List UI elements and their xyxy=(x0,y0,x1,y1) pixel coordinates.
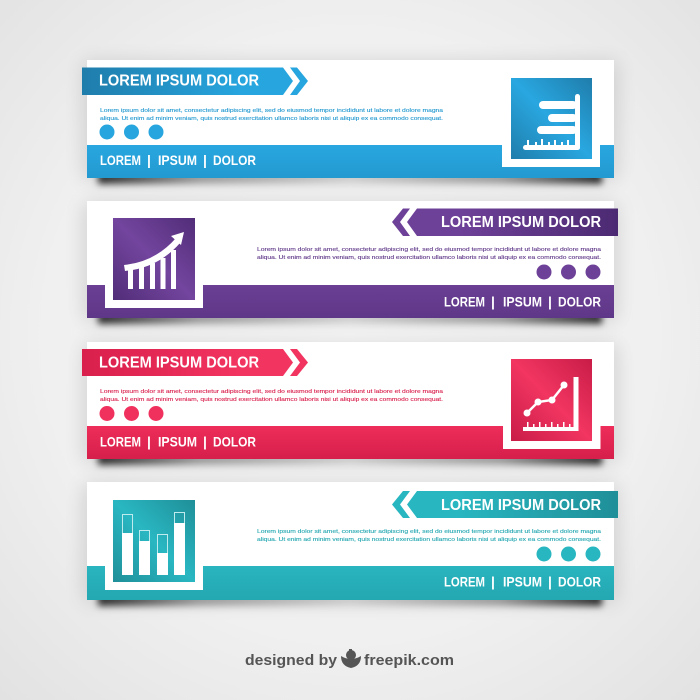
banner 2 card xyxy=(87,201,614,318)
banner 3: red xyxy=(82,342,617,465)
banner 3 ribbon xyxy=(82,349,308,376)
banner 4 band label: | xyxy=(548,574,552,590)
banner 1 card xyxy=(87,60,614,178)
icon: rising bars with arrow xyxy=(113,218,195,300)
banner 3 heading: LOREM IPSUM DOLOR xyxy=(99,354,259,372)
icon: line chart xyxy=(511,359,592,441)
banner 4 band xyxy=(87,566,614,600)
banner 4 band label: LOREM xyxy=(444,574,485,590)
banner 4 band label: IPSUM xyxy=(503,574,542,590)
banner 1 paragraph: Lorem ipsum dolor sit amet, consectetur adipiscing elit, sed do eiusmod tempor incididunt ut labore et dolore magna xyxy=(100,108,444,114)
banner 2 band label: LOREM xyxy=(444,294,485,310)
banner 2 dots xyxy=(536,264,600,280)
banner 1 ribbon xyxy=(82,68,308,95)
banner 1 band label: IPSUM xyxy=(158,152,197,168)
banner 3 band label: | xyxy=(203,434,207,450)
banner 2 heading: LOREM IPSUM DOLOR xyxy=(441,214,601,231)
banner 3 band label: LOREM xyxy=(100,434,141,450)
banner 1: blue xyxy=(82,60,617,184)
banner 2 band label: | xyxy=(548,294,552,310)
banner 2 paragraph: Lorem ipsum dolor sit amet, consectetur adipiscing elit, sed do eiusmod tempor incididunt ut labore et dolore magna xyxy=(257,247,602,253)
credit text left: designed by xyxy=(245,652,338,669)
banner 1 band label: LOREM xyxy=(100,152,141,168)
banner 3 paragraph: Lorem ipsum dolor sit amet, consectetur adipiscing elit, sed do eiusmod tempor incididunt ut labore et dolore magna xyxy=(100,389,444,395)
footer credit xyxy=(245,649,454,669)
banner 2 band xyxy=(87,285,614,318)
banner 1 shadow xyxy=(84,62,617,184)
banner 3 band label: IPSUM xyxy=(158,434,197,450)
banner 1 band label: | xyxy=(203,152,207,168)
banner 4 shadow xyxy=(84,484,617,606)
banner 4 card xyxy=(87,482,614,600)
banner 2 band label: DOLOR xyxy=(558,294,601,310)
banner 1 band label: | xyxy=(147,152,151,168)
banner 3 band label: DOLOR xyxy=(213,434,256,450)
banner 4 ribbon xyxy=(392,491,618,518)
banner 1 band label: DOLOR xyxy=(213,152,256,168)
banner 4 band label: | xyxy=(491,574,495,590)
banner 3 card xyxy=(87,342,614,459)
banner 4: teal xyxy=(84,482,618,606)
banner 2 band label: IPSUM xyxy=(503,294,542,310)
credit text right: freepik.com xyxy=(364,652,454,669)
banner 1 band xyxy=(87,145,614,178)
banner 2: purple xyxy=(84,201,618,324)
banner 1 paragraph: aliqua. Ut enim ad minim veniam, quis nostrud exercitation ullamco laboris nisi ut aliquip ex ea commodo consequat. xyxy=(100,116,444,122)
banner 3 band label: | xyxy=(147,434,151,450)
icon: horizontal bar chart xyxy=(511,78,592,159)
banner 4 paragraph: aliqua. Ut enim ad minim veniam, quis nostrud exercitation ullamco laboris nisi ut aliquip ex ea commodo consequat. xyxy=(257,537,602,543)
banner 3 shadow xyxy=(84,344,617,465)
banner 3 dots xyxy=(100,406,164,421)
icon: freepik logo xyxy=(341,649,361,668)
banner 4 dots xyxy=(536,546,600,562)
banner 3 paragraph: aliqua. Ut enim ad minim veniam, quis nostrud exercitation ullamco laboris nisi ut aliquip ex ea commodo consequat. xyxy=(100,397,444,403)
banner 4 band label: DOLOR xyxy=(558,574,601,590)
banner 2 shadow xyxy=(84,203,617,324)
banner 2 paragraph: aliqua. Ut enim ad minim veniam, quis nostrud exercitation ullamco laboris nisi ut aliquip ex ea commodo consequat. xyxy=(257,255,602,261)
banner 2 band label: | xyxy=(491,294,495,310)
banner 2 ribbon xyxy=(392,208,618,236)
banner 3 band xyxy=(87,426,614,459)
icon: vertical bar chart xyxy=(113,500,195,582)
banner 1 heading: LOREM IPSUM DOLOR xyxy=(99,72,259,90)
banner 4 heading: LOREM IPSUM DOLOR xyxy=(441,497,601,514)
banner 1 dots xyxy=(100,124,164,140)
banner 4 paragraph: Lorem ipsum dolor sit amet, consectetur adipiscing elit, sed do eiusmod tempor incididunt ut labore et dolore magna xyxy=(257,529,602,535)
